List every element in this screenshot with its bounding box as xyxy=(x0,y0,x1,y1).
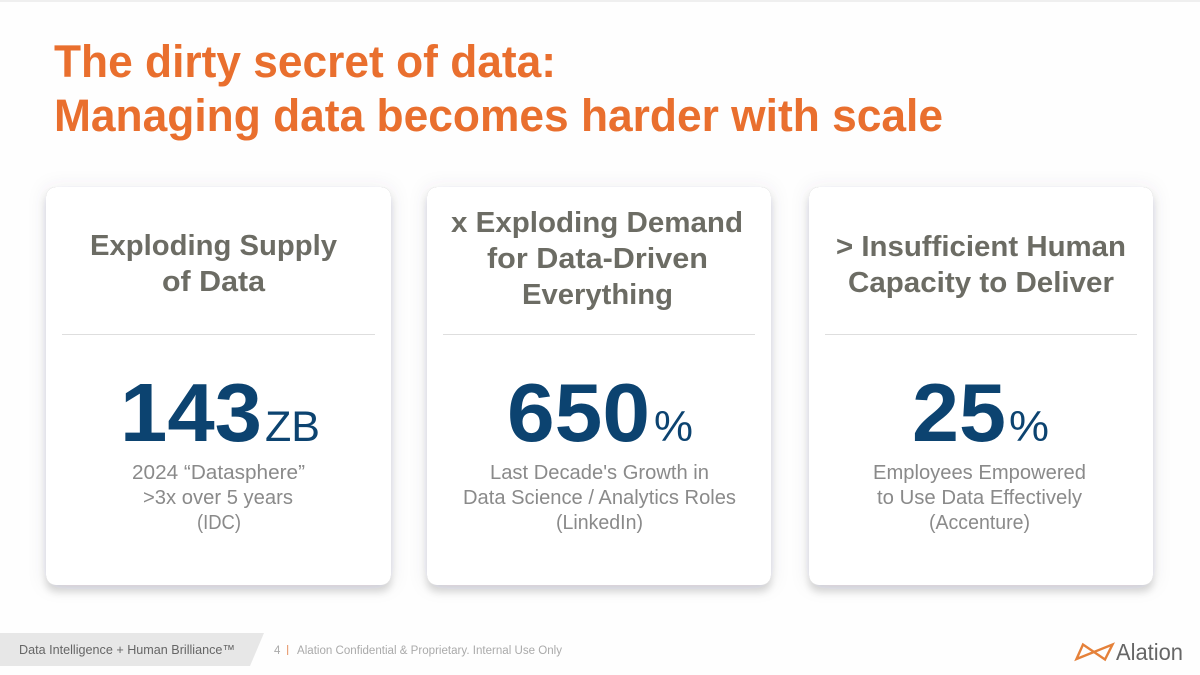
heading: insufficient human capacity: > Insufficient Human xyxy=(836,231,1126,263)
description: analytics roles: Data Science / Analytics Roles xyxy=(463,487,736,509)
heading: insufficient human capacity xyxy=(836,231,1126,299)
footer tagline banner xyxy=(0,633,264,666)
footer tagline banner: Data Intelligence + Human Brilliance™ xyxy=(19,642,235,657)
heading: insufficient human capacity: Capacity to Deliver xyxy=(848,267,1114,299)
description: datasphere: (IDC) xyxy=(197,512,241,534)
description: employees empowered xyxy=(873,462,1086,534)
footer confidentiality note: 4 xyxy=(274,645,281,657)
description: employees empowered: (Accenture) xyxy=(929,512,1030,534)
stat: 143 ZB: 143 xyxy=(120,366,262,459)
footer confidentiality note: Alation Confidential & Proprietary. Internal Use Only xyxy=(297,645,562,657)
stat: 25 percent xyxy=(912,366,1049,459)
heading: exploding supply: of Data xyxy=(162,266,266,298)
stat: 143 ZB: ZB xyxy=(265,403,320,451)
title: Managing data becomes harder with scale xyxy=(54,90,943,141)
logo: Alation: Alation xyxy=(1116,639,1183,665)
heading: exploding supply xyxy=(90,230,337,298)
description: analytics roles: Last Decade's Growth in xyxy=(490,462,709,484)
description: datasphere: 2024 “Datasphere” xyxy=(132,462,305,484)
heading: exploding demand: x Exploding Demand xyxy=(451,207,743,239)
panel: insufficient human capacity xyxy=(809,187,1153,585)
stat: 143 ZB xyxy=(120,366,320,459)
heading: exploding demand xyxy=(451,207,743,311)
panel: exploding supply of data xyxy=(46,187,391,585)
description: analytics roles xyxy=(463,462,736,534)
description: datasphere: >3x over 5 years xyxy=(143,487,293,509)
description: analytics roles: (LinkedIn) xyxy=(556,512,643,534)
heading: exploding demand: for Data-Driven xyxy=(487,243,708,275)
logo: Alation xyxy=(1076,639,1183,665)
stat: 650 percent: % xyxy=(654,403,693,451)
stat: 650 percent: 650 xyxy=(507,366,650,459)
panel: exploding demand xyxy=(427,187,771,585)
description: employees empowered: Employees Empowered xyxy=(873,462,1086,484)
description: datasphere xyxy=(132,462,305,534)
title: The dirty secret of data: xyxy=(54,36,556,87)
stat: 25 percent: 25 xyxy=(912,366,1006,459)
description: employees empowered: to Use Data Effectively xyxy=(877,487,1082,509)
icon: orange bowtie xyxy=(1076,644,1112,660)
heading: exploding demand: Everything xyxy=(522,279,673,311)
title xyxy=(54,36,943,141)
stat: 25 percent: % xyxy=(1009,403,1049,451)
heading: exploding supply: Exploding Supply xyxy=(90,230,337,262)
